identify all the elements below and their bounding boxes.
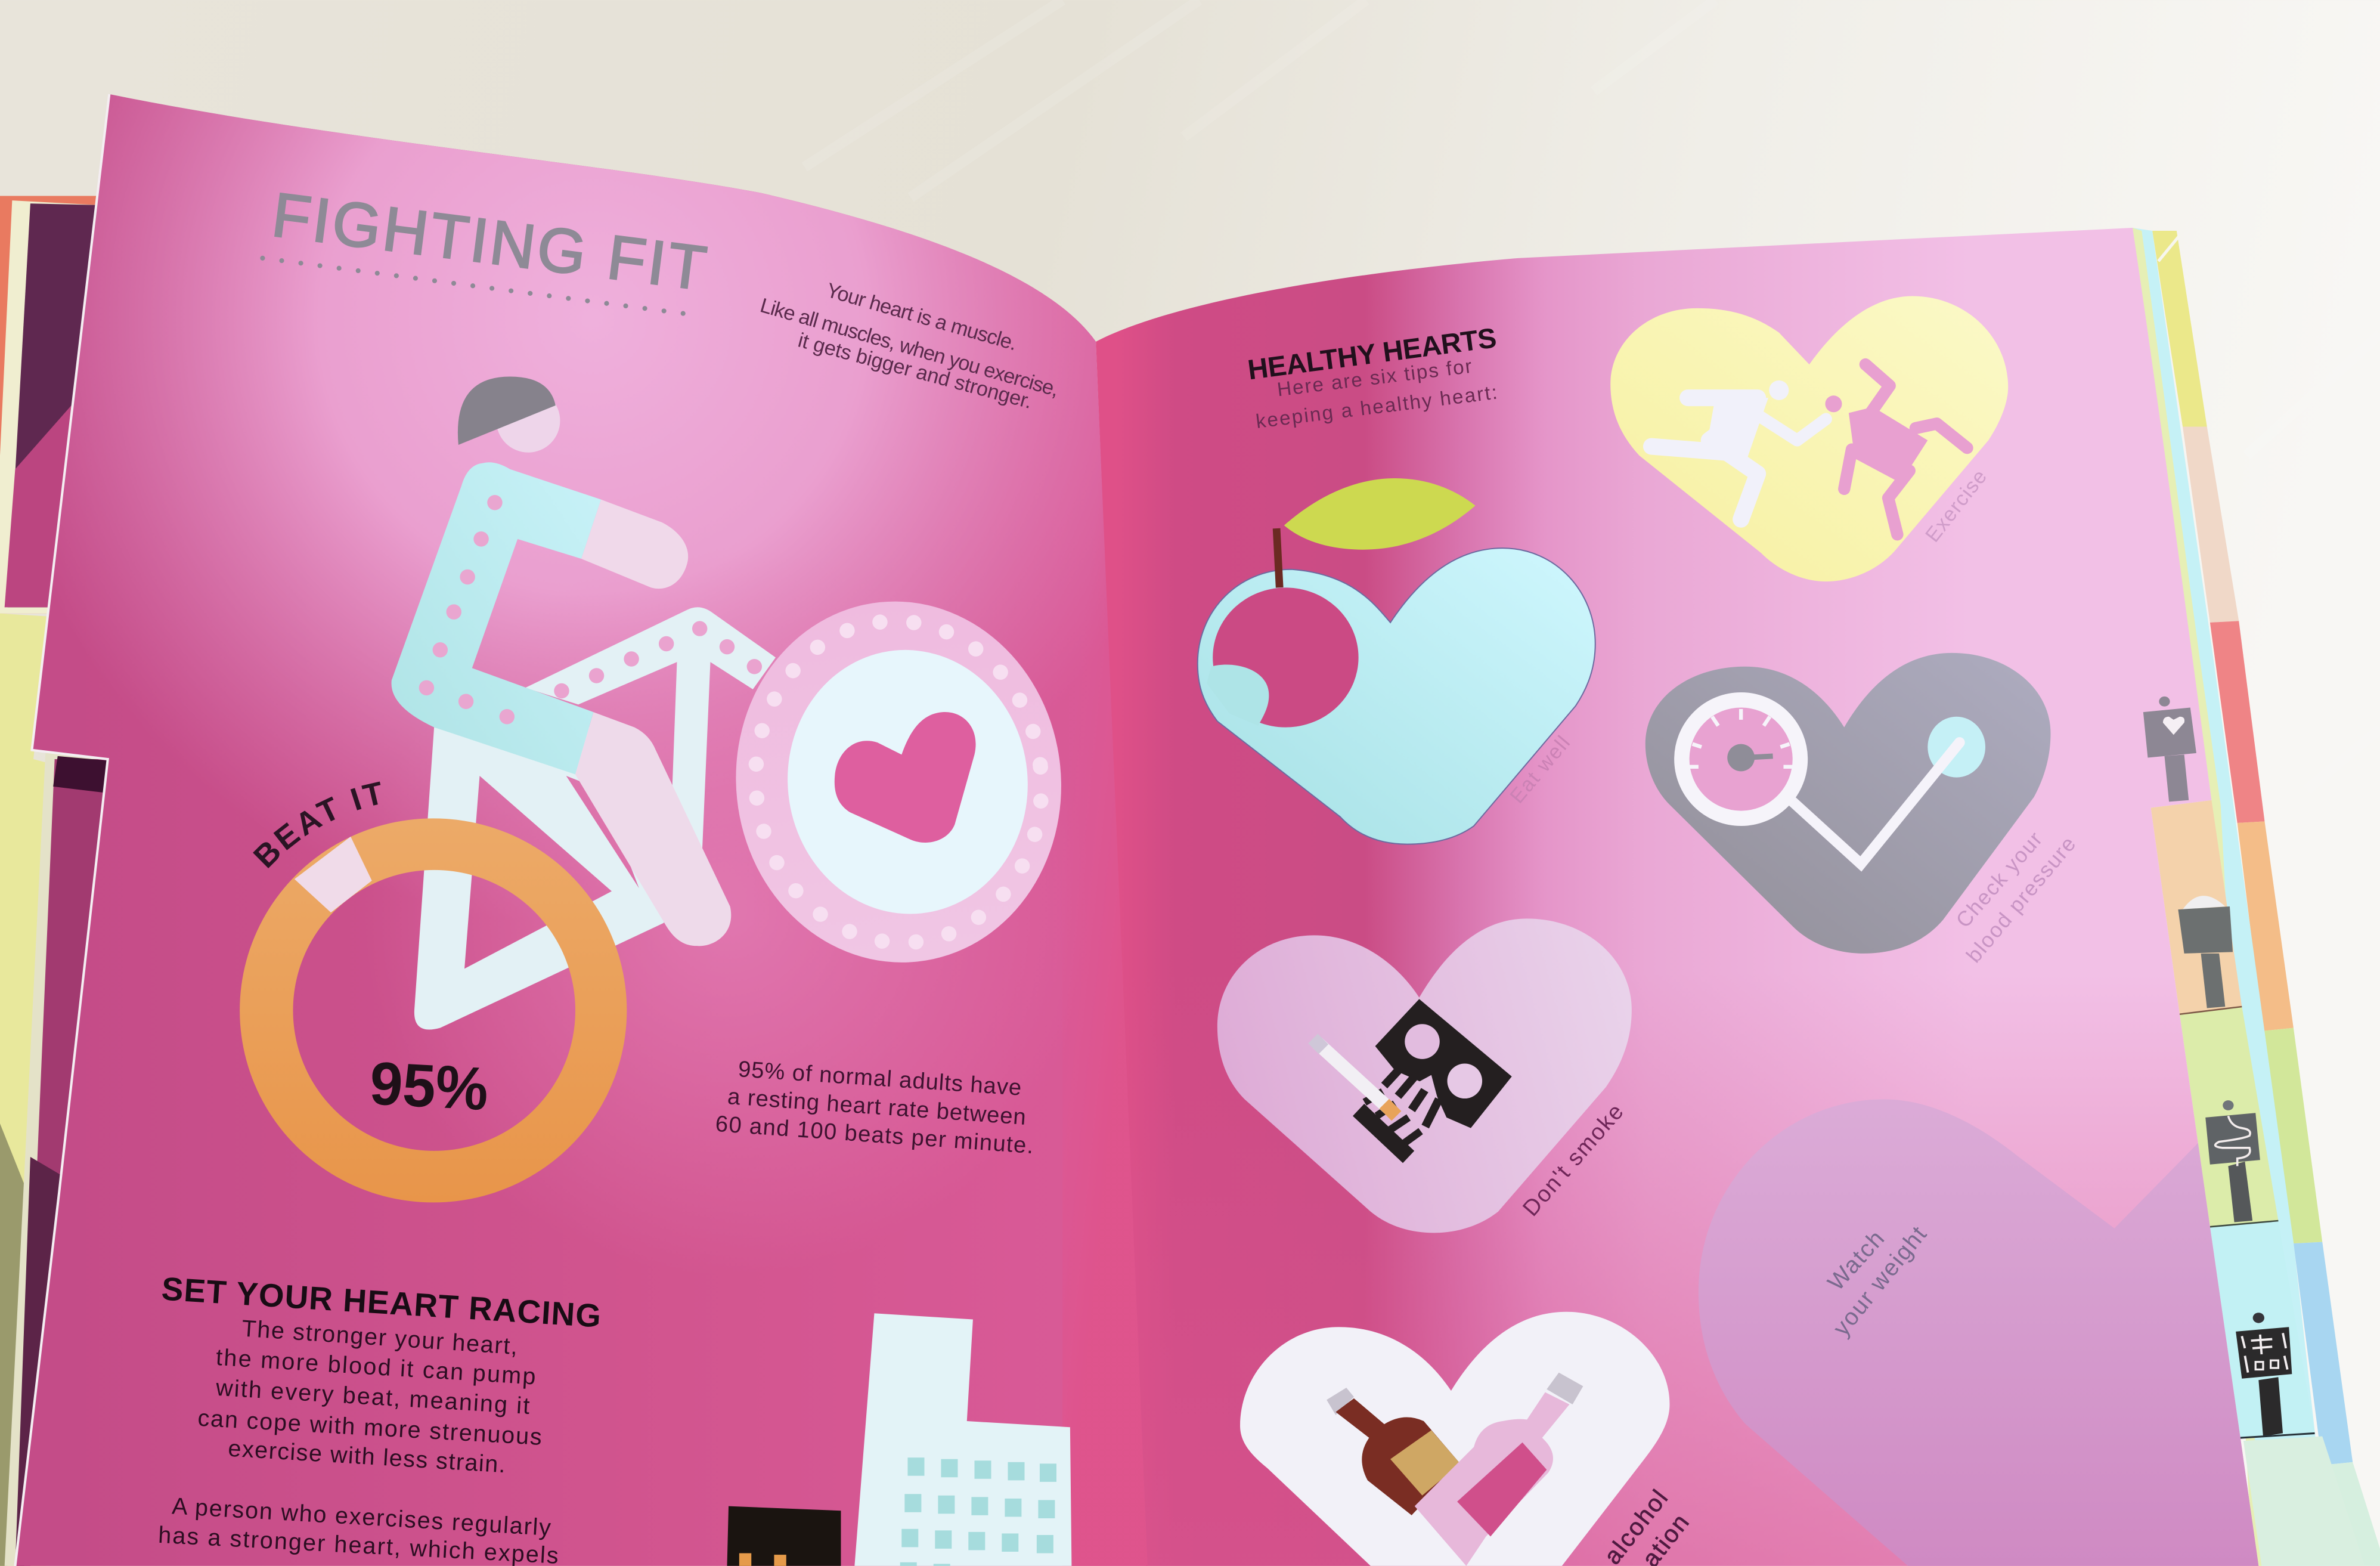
icon: apple curl [1207,664,1269,726]
intro text: it gets bigger and stronger. [796,329,1034,413]
bike frame [414,607,776,1030]
section tabs on the right edge [2133,228,2380,1566]
torso and arm [392,462,688,774]
icon: skull [1359,999,1512,1157]
label: check your blood pressure: Check your [1951,827,2048,932]
icon: apple leaf [1284,478,1476,550]
caption: resting heart rate: a resting heart rate between [727,1084,1027,1130]
caption: resting heart rate [714,1056,1034,1159]
building: dark block [727,1506,841,1566]
caption: resting heart rate: 95% of normal adults have [737,1056,1022,1101]
icon: green tab figure with intestine [2205,1100,2278,1227]
intro text: Your heart is a muscle. [824,279,1019,355]
illustration: buildings [727,1313,1071,1566]
heading: healthy hearts [1248,329,1496,428]
other pages behind, left side [0,196,114,1566]
icon: tube [1793,742,1960,864]
leg [575,712,731,946]
icon: dark bottle [1327,1388,1460,1515]
icon: apple bite [1213,587,1359,728]
tab: green [2180,1007,2278,1227]
icon: apple stem [1276,528,1279,587]
body text: set your heart racing: with every beat, meaning it [215,1375,531,1419]
heading: healthy hearts: Here are six tips for [1276,355,1473,401]
intro text: Like all muscles, when you exercise, [758,294,1061,401]
title: fighting fit: FIGHTING FIT [268,180,712,304]
label: watch your weight: your weight [1828,1221,1932,1341]
heart: limit alcohol [1240,1312,1695,1566]
page edge highlight [15,94,109,1566]
donut chart: beat it 95% [240,775,627,1202]
heading: healthy hearts: keeping a healthy heart: [1254,382,1498,433]
icon: pressure gauge [1682,700,1800,818]
right page [1062,212,2277,1566]
wheel with heart [718,585,1079,979]
heading: set your heart racing: SET YOUR HEART RACING [160,1270,602,1335]
heart: watch your weight [1699,1100,2258,1566]
icon: heart figure on pink page [2143,697,2196,801]
body text: set your heart racing: A person who exercises regularly [171,1493,551,1541]
label: don't smoke: Don't smoke [1518,1098,1629,1221]
illustration: cyclist [392,376,1079,1030]
heading: healthy hearts: HEALTHY HEARTS [1246,321,1498,385]
tab: cyan [2210,1221,2315,1438]
icon: orange tab figure [2178,896,2242,1014]
label: watch your weight: Watch [1823,1225,1890,1296]
body text: set your heart racing [157,1316,559,1566]
heart: eat well apple [1198,478,1595,844]
icon: pink bottle [1415,1373,1583,1566]
caption: resting heart rate: 60 and 100 beats per minute. [714,1111,1034,1159]
label: check your blood pressure: blood pressure [1961,831,2081,967]
icon: cyan tab figure with skeleton [2236,1313,2315,1438]
heart: don't smoke [1217,918,1632,1233]
icon: white runner [1651,380,1826,519]
head [458,376,560,453]
building: pale tower [854,1313,1071,1566]
heart: check blood pressure [1645,653,2081,967]
chart segment: remaining 5% [295,837,372,912]
heading: beat it: BEAT IT [253,781,380,868]
icon: cigarette [1313,1038,1396,1116]
body text: set your heart racing: the more blood it can pump [215,1344,537,1390]
tab: orange [2151,800,2242,1014]
icon: cuff bulb [1927,717,1985,778]
icon: pink runner [1825,364,1967,534]
left page [17,94,1147,1566]
body text: set your heart racing: can cope with more strenuous [197,1405,543,1450]
outer colour bands [2152,231,2380,1566]
thin page strips [2133,228,2330,1566]
heart: exercise [1610,296,2008,581]
body text: set your heart racing: The stronger your heart, [241,1316,518,1360]
value: 95%: 95% [368,1049,490,1123]
body text: set your heart racing: exercise with less strain. [227,1435,506,1478]
label: exercise: Exercise [1921,465,1992,546]
label: eat well: Eat well [1505,731,1575,808]
tab: pale green [2243,1437,2365,1566]
building windows [900,1457,1056,1566]
building: lit windows [739,1553,786,1566]
icon: heart [835,712,976,843]
